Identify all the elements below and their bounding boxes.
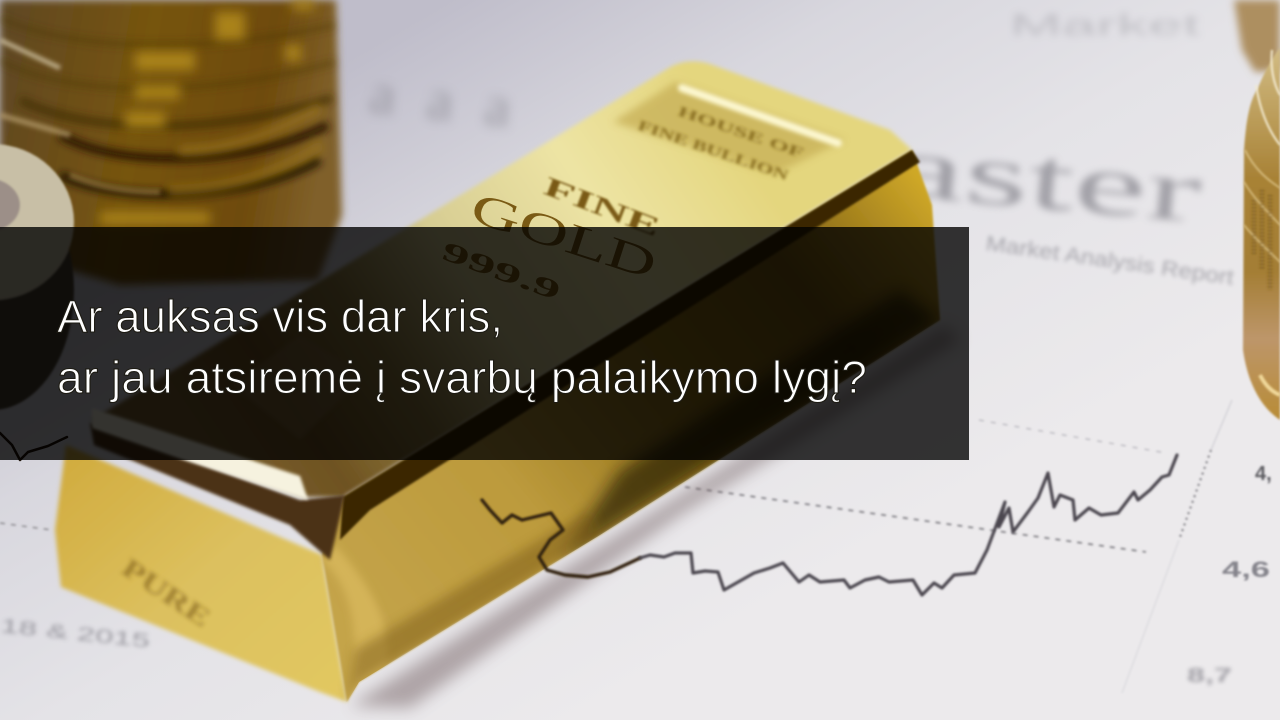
blurred printed text on paper: aaa [367,60,546,143]
end face [55,445,347,702]
coin stack top left [0,0,342,285]
blurred printed text on paper: 18 & 2015 [0,616,151,653]
top edge dark band [340,150,920,540]
coin ridges [0,18,335,194]
shadow under gold bar [350,325,960,708]
title text: Ar auksas vis dar kris, [57,291,503,342]
near edge dark band [90,423,345,560]
gold bar stamp: FINE BULLION [636,118,791,184]
coin rim lines [1244,50,1280,395]
gold bar stamp: HOUSE OF [676,104,806,162]
plaque on top face [613,82,845,174]
blurred printed text on paper: 4, [1255,463,1272,485]
edge highlight [92,408,308,500]
silver coin left [0,144,74,410]
title text [57,291,867,403]
plaque highlight [682,88,838,143]
stock price line [0,433,1177,595]
side face [322,150,940,702]
blurred printed text on paper: aster [888,118,1206,242]
gold bar stamp: FINE [540,172,664,242]
coin rim reflections [0,40,160,192]
gold bar [55,61,940,702]
gold bar stamp: GOLD [465,183,663,289]
gold bar stamp: 999.9 [438,235,565,306]
coin body [1243,48,1280,420]
blurred printed text on paper: 8,7 [1187,665,1232,687]
blurred printed text on paper: Market Analysis Report [984,232,1235,290]
coin highlights [100,0,314,224]
right coin stack [1234,0,1280,420]
gold bar stamp [117,104,806,633]
dark title banner [0,227,969,460]
blurred printed text on paper: Market [1010,9,1201,42]
plaque at lower top face [232,335,365,440]
chart grid dotted lines [0,400,1232,693]
side face shading, clipped to bar [322,290,940,702]
blurred printed text on paper: 4,6 [1222,557,1270,582]
top face [92,61,912,497]
title text: ar jau atsiremė į svarbų palaikymo lygį? [57,352,867,403]
gold bar stamp: PURE [117,553,216,633]
